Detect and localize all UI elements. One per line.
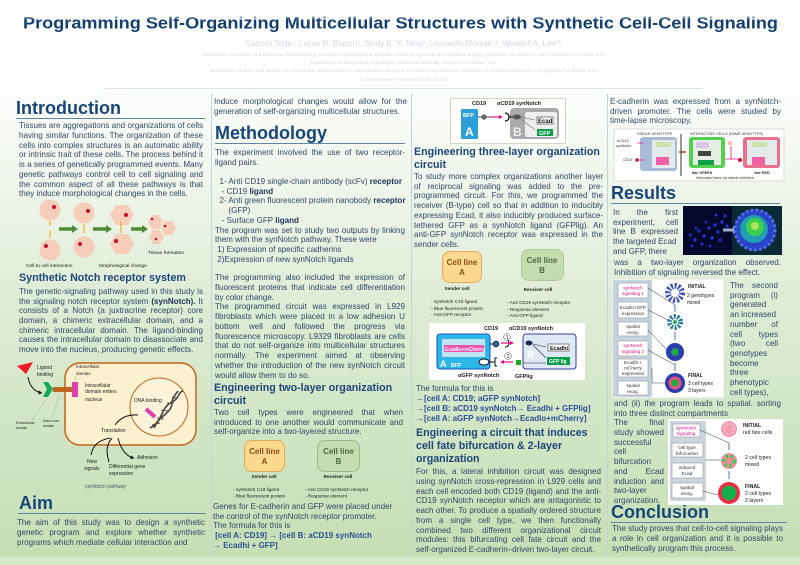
text: three-layer formula: The formula for this is — [416, 384, 493, 393]
text: synNotch: the signaling notch receptor system (synNotch). It — [19, 297, 203, 306]
text: conclusion: a role in cell organization and it is possible to — [612, 534, 783, 543]
heading: two-layer circuit: circuit — [214, 395, 246, 407]
figure: synNotch pathway: Intracellular — [85, 383, 111, 389]
text: introduction: the common aspect of all these pathways is that — [19, 180, 203, 188]
figure: three-layer program: spatial — [626, 324, 640, 329]
text: three-layer: expressing Ecad, it also inducibly produced surface- — [414, 211, 603, 220]
text: results second: The second — [730, 281, 778, 290]
text: three-layer: anti-GFP synNotch receptor was expressed in the — [414, 230, 603, 239]
figure: three-layer circuit: GFP lig — [549, 359, 566, 365]
figure: cell lines two-layer: Cell line — [323, 447, 354, 456]
text: programming: fluorescence microscopy. L9329 fibroblasts are cells — [215, 332, 405, 340]
text: bifurcation: modules: this bifurcating cell fate circuit and the — [416, 535, 601, 544]
text: introduction — [19, 121, 203, 198]
figure: synNotch pathway: domain — [43, 424, 54, 428]
figure: cell lines two-layer: - synNotch C19 ligand — [233, 487, 280, 492]
figure: three-layer program: reorg. — [627, 330, 639, 335]
heading: Aim — [18, 493, 206, 514]
heading: Conclusion: Conclusion — [611, 502, 709, 522]
figure: three-layer circuit: 2 — [507, 354, 510, 360]
text: two-layer: Two cell types were engineered that when — [214, 408, 403, 417]
figure: final study program: Ecad — [682, 471, 693, 477]
figure: cell lines three-layer: Sender cell — [444, 286, 470, 291]
text: results first: the targeted Ecad — [613, 237, 677, 246]
text: programming: The programmed circuit was expressed in L929 — [215, 302, 405, 311]
figure: three-layer circuit: BFP — [451, 363, 462, 369]
authors block: ³Department of Stem Cell Biology, Eli and Edythe Broad Center for Regenerative Medicine and Stem Cell Research, University of Southern California, Los Angeles, CA 90033, USA — [209, 69, 598, 74]
text: results third: study showed — [614, 428, 664, 437]
figure: final study program: signaling — [677, 431, 696, 437]
figure: three-layer program: mCherry — [624, 366, 643, 370]
text: bifurcation — [416, 467, 601, 554]
figure: final study program: reorg. — [681, 491, 693, 497]
text: introduction: having similar functions. The organization of these — [19, 131, 203, 140]
text: experiment intro — [215, 148, 405, 167]
figure: single vs interacting genotype: synNotch — [616, 144, 631, 148]
text: bifurcation: CD19 synNotch receptor which are antagonistic to — [416, 496, 601, 505]
text: two-layer formula: [cell A: CD19] → [cell B: aCD19 synNotch — [215, 531, 372, 540]
text: aim — [17, 518, 205, 547]
formula lines: →[cell B: aCD19 synNotch→ Ecadhi + GFPlig] — [416, 404, 590, 413]
text: bifurcation: from a single cell type, we then functionally — [416, 516, 601, 525]
figure: fluorescence microscopy photo — [683, 206, 782, 255]
figure: final study program — [668, 419, 783, 505]
text: aim: programs which mediate cellular interaction and — [17, 538, 187, 547]
figure: three-layer circuit: Ecadhi — [550, 346, 569, 352]
text: results second: cell types), — [730, 388, 768, 397]
text: results second: an increased — [730, 310, 776, 319]
heading: Aim: Aim — [19, 493, 53, 513]
text: results first: line B expressed — [613, 227, 678, 236]
text: synNotch: The genetic-signaling pathway used in this study is — [19, 287, 203, 296]
figure: three-layer program: expression — [622, 371, 645, 376]
text: three-layer: of reciprocal signaling was added to the pre- — [414, 182, 603, 191]
figure: tissue formation: Cell to cell interaction — [26, 263, 73, 269]
figure: synNotch pathway: Adhesion — [137, 455, 158, 461]
authors block: ²Department of Mechanical Engineering, Stanford University, Stanford, CA 94305, USA — [309, 61, 498, 66]
text: two-layer: self-organize into a two-layered structure. — [214, 427, 362, 436]
figure: synNotch pathway: nucleus — [85, 397, 103, 403]
figure: three-layer program: synNotch — [623, 286, 643, 290]
text: receptor ligand list: (GFP) — [228, 206, 250, 215]
figure: single vs interacting genotype: αCD19 — [617, 139, 629, 143]
figure: three-layer program: INITIAL — [688, 284, 706, 290]
text: results second: generated — [730, 300, 766, 309]
text: results first continued — [614, 258, 781, 277]
authors block — [105, 38, 702, 89]
text: two-layer: introduced to one another would communicate and — [214, 418, 403, 427]
text: results third: cell — [614, 447, 626, 456]
figure: cell lines three-layer: Cell line — [527, 256, 558, 265]
figure: three-layer program: 2 genotypes — [687, 293, 715, 299]
heading: Methodology — [215, 123, 405, 144]
figure: cell lines three-layer: - Blue fluorescent protein — [431, 306, 484, 311]
text: aim: genetic program and explore whether synthetic — [17, 528, 205, 537]
figure: three-layer program: 3 layers — [688, 388, 706, 394]
figure: single vs interacting genotype: fate RED — [754, 171, 770, 175]
text: e-cadherin: E-cadherin was expressed from a synNotch- — [610, 97, 781, 106]
text: results second: phenotypic — [730, 378, 769, 387]
figure: three-layer circuit: αCD19 synNotch — [509, 326, 554, 332]
figure: synNotch pathway: Ligand — [37, 365, 52, 371]
heading: two-layer circuit: Engineering two-layer organization — [214, 382, 392, 394]
figure: final study program: red fate cells — [743, 430, 773, 436]
text: synNotch: causes the intracellular domain to disassociate and — [19, 335, 203, 344]
text: aim continued: Induce morphological changes would allow for the — [214, 97, 407, 106]
text: programming: would allow them to do so. — [215, 370, 310, 380]
figure: cell lines three-layer: - Anti-GFP ligand — [507, 313, 543, 318]
text: two-layer formula: → Ecadhi + GFP] — [213, 541, 278, 550]
text: results second: three — [730, 368, 748, 377]
text: results second: (two cell — [730, 339, 778, 348]
figure: final study program: spatial — [680, 485, 694, 491]
figure: synNotch pathway: signals — [84, 466, 100, 472]
figure: synNotch pathway — [16, 362, 196, 490]
figure: cell lines three-layer: - Anti CD19 synNotch receptor — [507, 300, 571, 305]
figure: three-layer circuit: CD19 — [484, 326, 498, 332]
text: introduction: is a series of genetically programmed events. Many — [19, 160, 203, 169]
figure: three-layer program: reorg. — [627, 389, 639, 394]
figure: synNotch pathway: Notch core — [43, 419, 60, 423]
text: conclusion — [612, 524, 783, 553]
figure: synNotch pathway: Translation — [101, 428, 126, 434]
figure: two-layer circuit: GFP — [539, 131, 551, 137]
text: results third — [614, 418, 664, 505]
figure: three-layer program: expression — [622, 311, 645, 316]
figure: synNotch pathway: binding — [37, 372, 53, 378]
figure: three-layer circuit: GFPlig — [515, 374, 533, 380]
figure: tissue formation: Tissue formation — [148, 250, 184, 256]
heading: bifurcation circuit — [416, 426, 588, 464]
figure: three-layer program: FINAL — [688, 373, 703, 379]
text: three-layer: tethered GFP as a synNotch ligand (GFPlig). An — [414, 221, 603, 230]
heading: bifurcation circuit: Engineering a circuit that induces — [416, 426, 588, 438]
formula lines: →[cell A: aGFP synNotch→Ecadlo+mCherry] — [416, 414, 586, 423]
heading: three-layer circuit — [414, 146, 600, 170]
text: results first — [613, 208, 678, 256]
figure: cell lines two-layer: - Blue fluorescent protein — [233, 494, 286, 498]
text: bifurcation: For this, a lateral inhibition circuit was designed — [416, 467, 601, 476]
text: results second continued: and (ii) the program leads to spatial. sorting — [614, 399, 781, 408]
text: aim: The aim of this study was to design a synthetic — [17, 518, 205, 527]
heading: Methodology: Methodology — [215, 123, 327, 143]
text: bifurcation: using synNotch cross-repression in L929 cells and — [416, 477, 601, 486]
title: Programming Self-Organizing Multicellular Structures with Synthetic Cell-Cell Signaling — [23, 14, 778, 32]
text: results first continued: Inhibition of signaling reversed the effect. — [614, 268, 760, 277]
text: results first: In the first — [613, 208, 678, 217]
text: e-cadherin — [610, 97, 781, 125]
authors block: ¹Department of Cellular and Molecular Pharmacology, Howard Hughes Medical Institute, Center for Systems and Synthetic Biology, University of California, San Francisco, CA 94158, USA — [201, 53, 606, 58]
figure: final study program: 2 cell types — [745, 455, 771, 461]
text: results second: program (i) — [730, 291, 778, 300]
figure: final study program: FINAL — [745, 484, 761, 490]
figure: three-layer circuit: 1 — [506, 335, 509, 341]
figure: synNotch pathway: domain enters — [85, 389, 117, 395]
text: receptor ligand list: 1) Expression of specific cadherins — [217, 245, 342, 254]
heading: Introduction: Introduction — [16, 98, 121, 118]
figure: single vs interacting genotype: SINGLE GENOTYPE — [637, 132, 673, 136]
text: experiment intro: ligand pairs. — [215, 158, 258, 167]
figure: final study program: cell type — [678, 445, 696, 451]
figure: synNotch pathway: DNA binding — [134, 398, 162, 404]
heading: Results: Results — [611, 183, 676, 203]
text: results second: number of — [730, 320, 778, 329]
figure: cell lines three-layer — [431, 250, 571, 318]
text: programming: bottom well and followed the progress via — [215, 322, 405, 331]
figure: cell lines three-layer: - Anti-GFP receptor — [431, 312, 472, 317]
figure: three-layer program: signaling 1 — [622, 291, 644, 296]
figure: final study program: 2 layers — [745, 498, 764, 504]
figure: three-layer circuit: B — [527, 350, 534, 361]
text: results third: successful — [614, 438, 652, 446]
text: introduction: Tissues are aggregations and organizations of cells — [19, 121, 203, 130]
authors block: *Correspondence: wendell.lim@ucsf.edu — [359, 78, 448, 83]
figure: final study program: induced — [679, 465, 696, 471]
figure: three-layer program: synNotch — [623, 343, 643, 348]
figure: cell lines three-layer: - Response element — [507, 307, 550, 312]
text: results second: cell types — [730, 330, 778, 339]
heading: Synthetic Notch receptor system: Synthetic Notch receptor system — [19, 272, 186, 284]
figure: cell lines two-layer — [233, 440, 369, 498]
figure: three-layer circuit: A — [440, 359, 447, 369]
text: programming: that do not self-organize into multicellular structures — [215, 341, 405, 350]
figure: cell lines two-layer: - Anti CD19 synNotch receptor — [305, 487, 369, 492]
text: results third: induction and — [614, 476, 664, 486]
formula lines — [416, 394, 590, 423]
figure: final study program: bifurcation — [676, 451, 698, 457]
text: genes: Genes for E-cadherin and GFP were placed under — [213, 502, 392, 511]
figure: synNotch pathway: domain — [16, 426, 27, 430]
formula lines: →[cell A: CD19; aGFP synNotch] — [416, 394, 540, 403]
heading: three-layer circuit: circuit — [414, 158, 446, 170]
text: three-layer: receiver (B-type) cell so that in addition to inducibly — [414, 201, 603, 210]
text: three-layer — [414, 172, 603, 249]
figure: two-layer circuit: CD19 — [472, 101, 486, 107]
heading: bifurcation circuit: organization — [416, 452, 480, 464]
text: receptor ligand list: 2- Anti green fluorescent protein nanobody receptor — [219, 196, 406, 205]
text: programming: by color change. — [215, 292, 274, 302]
text: three-layer: sender cells. — [414, 240, 459, 249]
text: two-layer — [214, 408, 403, 436]
heading: Results — [611, 183, 780, 204]
heading: Introduction — [16, 98, 205, 119]
text: results second: genotypes — [730, 349, 767, 358]
text: receptor ligand list: 2)Expression of new synNotch ligands — [217, 255, 354, 264]
text: programming: fluorescent proteins that indicate cell differentiation — [215, 283, 405, 292]
figure: three-layer program: spatial — [626, 383, 640, 388]
text: programming — [215, 273, 405, 380]
text: introduction: they induce morphological changes in the cells. — [19, 189, 188, 198]
figure: synNotch pathway: Differential gene — [109, 464, 146, 470]
text: results second continued — [614, 399, 781, 418]
text: genes — [213, 502, 392, 530]
text: synNotch — [19, 287, 203, 354]
figure: two-layer circuit: BFP — [463, 113, 474, 119]
figure: three-layer circuit — [429, 323, 585, 380]
heading: two-layer circuit — [214, 382, 392, 407]
figure: cell lines three-layer: Cell line — [447, 258, 478, 267]
heading: three-layer circuit: Engineering three-layer organization — [414, 146, 600, 158]
figure: final study program: 2 cell types — [745, 491, 771, 497]
figure: final study program: synNotch — [676, 426, 696, 432]
text: results second continued: into three distinct compartments — [614, 409, 728, 418]
text: results second — [730, 281, 778, 397]
text: receptor ligand list: The program was set to study two outputs by linking — [215, 226, 405, 235]
figure: tissue formation — [26, 200, 184, 269]
figure: single vs interacting genotype — [614, 129, 784, 181]
figure: cell lines two-layer: A — [262, 457, 268, 466]
text: results third: and Ecad — [614, 467, 664, 476]
text: results third: organization. — [614, 496, 660, 505]
text: synNotch: domain, a chimeric extracellular domain, and a — [19, 316, 203, 325]
figure: cell lines three-layer: B — [539, 266, 545, 275]
figure: three-layer circuit: Ecadlo+mCherry — [445, 347, 485, 353]
text: bifurcation: self-organized E-cadherin–driven two-layer circuit. — [416, 545, 594, 554]
text: programming: The programming also included the expression of — [215, 273, 405, 282]
figure: three-layer program: signaling 2 — [622, 349, 644, 354]
figure: single vs interacting genotype: bifurcated fates via lateral inhibition — [696, 176, 754, 180]
text: receptor ligand list — [215, 177, 406, 264]
text: results third: two-layer — [614, 486, 647, 495]
text: aim continued — [214, 97, 407, 116]
text: three-layer: To study more complex organizations another layer — [414, 172, 603, 181]
figure: cell lines two-layer: Cell line — [249, 447, 280, 456]
figure: single vs interacting genotype: CD19 — [623, 158, 632, 162]
figure: three-layer program: Ecadlo+GFP — [620, 305, 646, 310]
figure: synNotch pathway: Extracellular — [16, 421, 36, 425]
text: programming: whether the introduction of the new synNotch circuit — [215, 361, 405, 370]
text: programming: fibroblasts which were placed in a low adhesion U — [215, 312, 405, 321]
figure: two-layer circuit: B — [513, 125, 522, 139]
figure: cell lines three-layer: - synNotch C19 ligand — [431, 299, 478, 304]
text: synNotch: move into the nucleus, producing genetic effects. — [19, 345, 193, 354]
text: results first: and GFP, there — [613, 247, 667, 256]
figure: three-layer program: Ecadhi + — [624, 360, 642, 365]
text: e-cadherin: driven promoter. The cells were studied by — [610, 107, 781, 116]
text: receptor ligand list: 1- Anti CD19 single-chain antibody (scFv) receptor — [219, 177, 402, 186]
text: introduction: or intrinsic trait of these cells. The process behind it — [19, 150, 203, 159]
text: introduction: cells into complex structures is an automatic ability — [19, 140, 203, 150]
text: receptor ligand list: - Surface GFP ligand — [222, 216, 299, 225]
figure: single vs interacting genotype: INTERACTING CELLS (SAME GENOTYPE) — [690, 132, 763, 136]
authors block: Satoshi Toda¹, Lucas R. Blauch², Sindy K. Y. Tang², Leonardo Morsut¹˒³, Wendell A. Lim¹* — [246, 39, 561, 48]
text: two-layer formula — [213, 531, 372, 550]
text: results second: become — [730, 359, 759, 368]
text: bifurcation: each other. To produce a spatially ordered structure — [416, 506, 601, 515]
figure: cell lines two-layer: - Response element — [305, 494, 348, 498]
figure: final study program: mixed — [745, 462, 759, 468]
figure: cell lines two-layer: B — [336, 457, 342, 466]
figure: three-layer program — [612, 279, 724, 398]
text: introduction: genetic pathways control cell to cell signaling and — [19, 170, 203, 179]
text: experiment intro: The experiment involved the use of two receptor- — [215, 148, 405, 157]
figure: three-layer circuit: αGFP synNotch — [458, 373, 500, 379]
heading: Conclusion — [611, 502, 787, 523]
figure: synNotch pathway: expression — [109, 471, 133, 477]
text: e-cadherin: time-lapse microscopy. — [610, 116, 692, 125]
figure: cell lines three-layer: A — [459, 268, 465, 277]
text: bifurcation: each cell encoded both CD19 (ligand) and the anti- — [416, 486, 601, 496]
figure: two-layer circuit: Ecad — [538, 119, 553, 125]
text: receptor ligand list: - CD19 ligand — [222, 187, 273, 196]
text: three-layer: programmed circuit. For this, we programmed the — [414, 191, 603, 200]
heading: bifurcation circuit: cell fate bifurcation & 2-layer — [416, 440, 562, 452]
text: results third: The final — [614, 418, 664, 427]
figure: synNotch pathway: domain — [76, 371, 91, 376]
text: results first continued: was a two-layer organization observed. — [614, 258, 781, 267]
figure: synNotch pathway: Intracellular — [76, 364, 100, 369]
text: receptor ligand list: them with the synNotch pathway. These were — [215, 235, 377, 244]
figure: cell lines three-layer: Receiver cell — [524, 287, 552, 292]
text: conclusion: The study proves that cell-to-cell signaling plays — [612, 524, 783, 533]
figure: tissue formation: Morphological change — [99, 263, 147, 269]
text: synNotch: chimeric intracellular domain. The ligand-binding — [19, 326, 203, 335]
text: bifurcation: combined two different organizational circuit — [416, 526, 601, 534]
text: programming: normally. The experiment aimed at observing — [215, 351, 405, 360]
figure: synNotch pathway: New — [87, 459, 97, 465]
text: genes: The formula for this is — [213, 521, 290, 530]
figure: single vs interacting genotype: fate GREEN — [692, 171, 713, 175]
text: aim continued: generation of self-organizing multicellular structures. — [214, 107, 400, 116]
figure: synNotch pathway: synNotch pathway — [85, 484, 126, 490]
figure: two-layer circuit — [450, 98, 566, 144]
figure: two-layer circuit: A — [465, 125, 474, 139]
figure: cell lines two-layer: Receiver cell — [324, 474, 352, 479]
figure: final study program: INITIAL — [743, 423, 762, 429]
text: synNotch: consists of a Notch (a juxtracrine receptor) core — [19, 306, 203, 315]
figure: two-layer circuit: αCD19 synNotch — [497, 101, 542, 107]
figure: three-layer program: 3 cell types — [688, 381, 714, 387]
text: results first: experiment, cell — [613, 218, 678, 227]
text: genes: the control of the synNotch receptor promoter. — [213, 512, 377, 521]
text: conclusion: synthetically program this process. — [612, 544, 735, 553]
figure: cell lines two-layer: Sender cell — [251, 474, 277, 479]
text: results third: bifurcation — [614, 457, 651, 466]
figure: three-layer program: mixed — [687, 300, 701, 306]
